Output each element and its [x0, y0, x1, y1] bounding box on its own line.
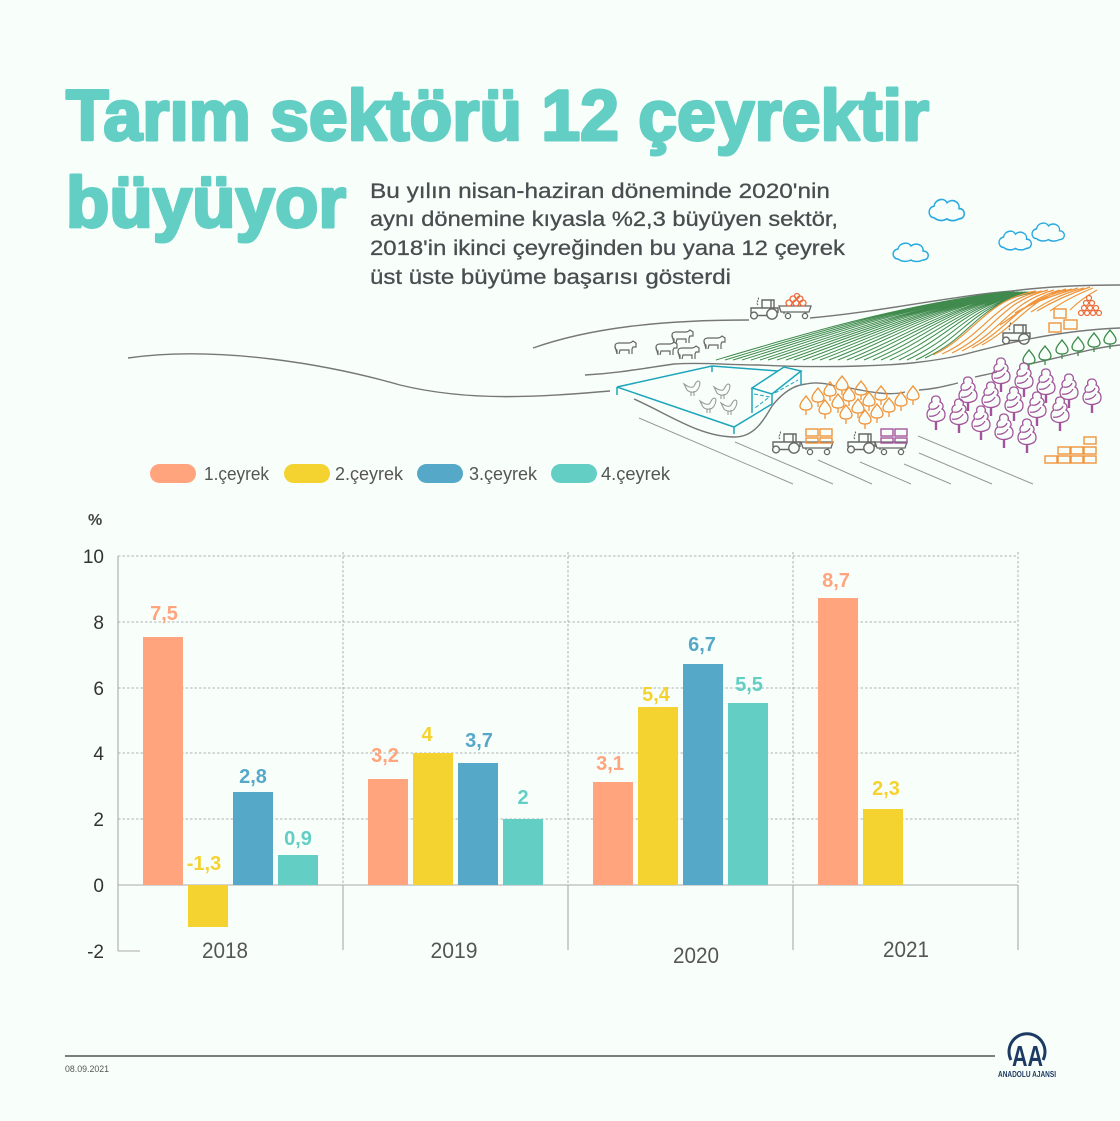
axis labels: 0: [93, 876, 104, 897]
icon: chickens: [684, 381, 737, 415]
title: büyüyor: [66, 164, 346, 243]
icon: purple trees: [927, 358, 1101, 453]
value labels: 7,5: [150, 603, 178, 625]
year labels: 2019: [430, 938, 478, 963]
axis labels: 2: [93, 810, 104, 831]
intro text: 2018'in ikinci çeyreğinden bu yana 12 çeyrek: [370, 236, 845, 260]
year labels: [202, 937, 929, 968]
value labels: 3,7: [465, 730, 493, 752]
icon: barn: [617, 366, 801, 434]
orange field: [933, 287, 1097, 355]
intro text: Bu yılın nisan-haziran döneminde 2020'nin: [370, 179, 830, 203]
intro text: aynı dönemine kıyasla %2,3 büyüyen sektör,: [370, 207, 838, 231]
value labels: -1,3: [187, 853, 221, 875]
illustration: farm landscape: [128, 199, 1120, 484]
value labels: [150, 570, 900, 875]
value labels: 5,4: [642, 684, 671, 706]
title: Tarım sektörü 12 çeyrektir: [66, 77, 929, 156]
year labels: 2021: [883, 937, 929, 962]
icon: cows: [615, 330, 725, 359]
hay bales and logs: [1045, 296, 1102, 463]
axis labels: [83, 547, 104, 963]
tractors with trailers: [751, 294, 1030, 455]
green field: [716, 291, 1036, 360]
logo: Anadolu Ajansi: ANADOLU AJANSI: [998, 1069, 1056, 1079]
axis labels: 10: [83, 547, 104, 568]
value labels: 6,7: [688, 634, 716, 656]
value labels: 3,1: [596, 753, 624, 775]
bar chart: [83, 512, 1018, 968]
year labels: 2020: [673, 943, 719, 968]
legend: 4.çeyrek: [601, 464, 671, 484]
axis labels: 6: [93, 679, 104, 700]
unit label: %: [88, 512, 102, 529]
value labels: 8,7: [822, 570, 850, 592]
axis labels: 4: [93, 744, 104, 765]
legend: 3.çeyrek: [469, 464, 538, 484]
value labels: 4: [421, 724, 433, 746]
intro text: [370, 179, 845, 289]
legend: 2.çeyrek: [335, 464, 404, 484]
bars: 1. çeyrek: [143, 598, 858, 885]
footer rule: [65, 1055, 995, 1057]
year labels: 2018: [202, 938, 248, 963]
landscape lines: [128, 285, 1120, 437]
value labels: 5,5: [735, 674, 763, 696]
date: 08.09.2021: [65, 1064, 109, 1075]
axis labels: -2: [87, 942, 104, 963]
bars: 2. çeyrek: [188, 707, 903, 927]
intro text: üst üste büyüme başarısı gösterdi: [370, 265, 731, 289]
value labels: 3,2: [371, 745, 399, 767]
icon: orange trees: [800, 376, 919, 429]
value labels: 2: [517, 787, 529, 809]
grid lines: [118, 552, 1018, 885]
logo: Anadolu Ajansi: AA: [1012, 1041, 1043, 1073]
bars: 3. çeyrek: [233, 664, 723, 885]
logo: Anadolu Ajansi: [998, 1034, 1056, 1079]
value labels: 2,8: [239, 766, 267, 788]
legend: [150, 464, 671, 484]
road lines: [639, 418, 1033, 484]
axis labels: 8: [93, 613, 104, 634]
title: [66, 77, 929, 243]
value labels: 2,3: [872, 778, 900, 800]
icon: clouds: [893, 199, 1064, 262]
icon: green trees: [1023, 330, 1116, 369]
legend: 1.çeyrek: [204, 464, 270, 484]
bars: 4. çeyrek: [278, 703, 768, 885]
value labels: 0,9: [284, 828, 312, 850]
